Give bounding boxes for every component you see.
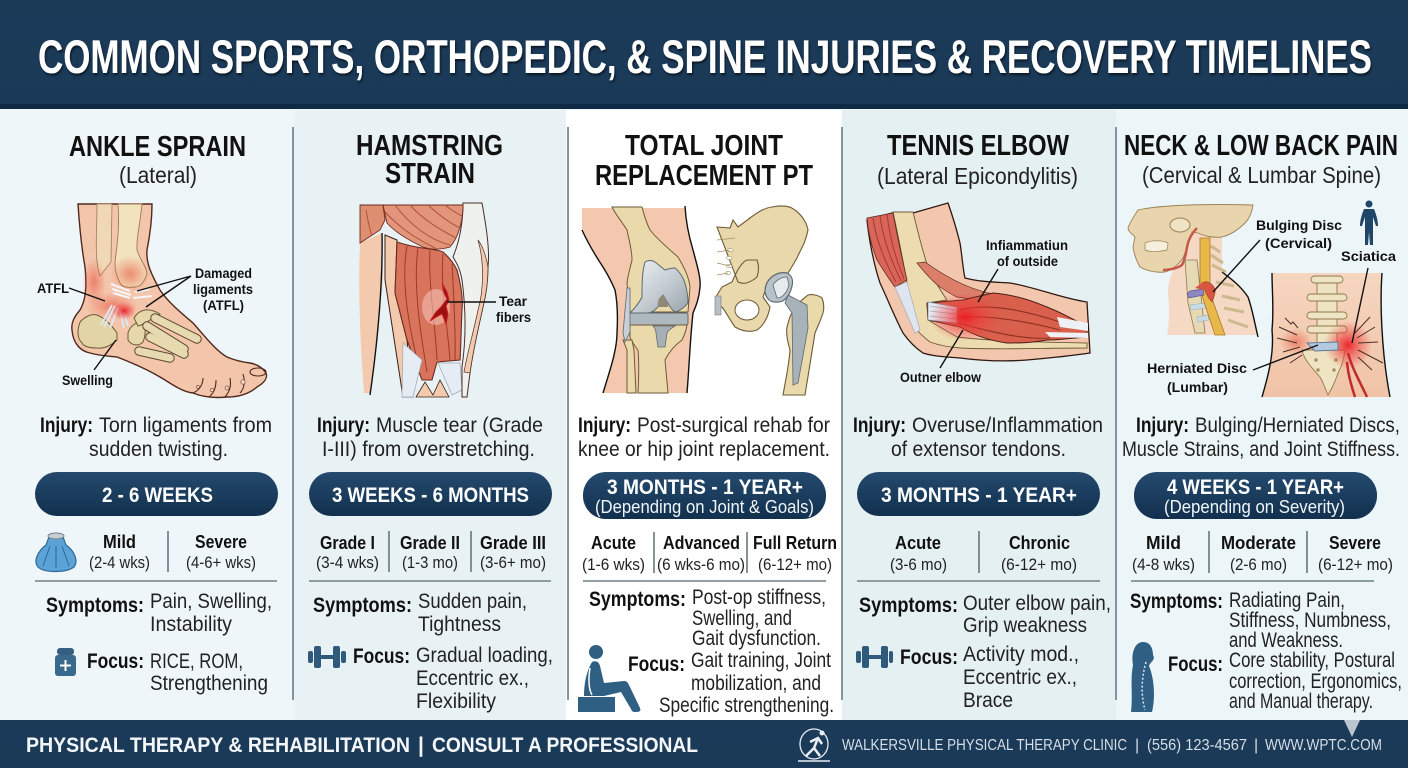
symptoms (1130, 589, 1391, 652)
illustration: knee replacement (582, 206, 700, 393)
injury text: Muscle tear (Grade (376, 414, 543, 437)
stage breakdown: Acute (895, 533, 941, 553)
icon: dumbbell (308, 646, 346, 668)
label: tear fibers: Tear (499, 293, 528, 309)
label: outer elbow: Outner elbow (900, 369, 981, 385)
icon: ice bag (36, 533, 76, 572)
footer tagline: CONSULT A PROFESSIONAL (432, 734, 698, 757)
label: herniated disc (1147, 345, 1318, 395)
label: inflammation of outside: of outside (997, 253, 1058, 269)
focus: Focus: (1168, 653, 1223, 676)
stage breakdown: Full Return (753, 533, 837, 553)
stage breakdown: Chronic (1009, 533, 1070, 553)
label: damaged ligaments: Damaged (195, 265, 252, 281)
label: ATFL: ATFL (37, 280, 69, 296)
footer bar (0, 720, 1408, 768)
focus (353, 644, 553, 713)
injury text (578, 414, 830, 461)
symptoms: Gait dysfunction. (692, 627, 821, 650)
focus: Focus: (353, 645, 410, 668)
injury text: sudden twisting. (89, 438, 228, 461)
focus: Focus: (628, 653, 685, 676)
footer tagline (26, 734, 698, 757)
stage breakdown: Severe (1329, 533, 1381, 553)
heading: tennis elbow: (Lateral Epicondylitis) (877, 163, 1078, 189)
injury text (1122, 414, 1400, 461)
panel: tennis elbow (842, 110, 1116, 720)
clinic contact: (556) 123-4567 (1147, 737, 1247, 754)
focus: RICE, ROM, (150, 650, 243, 673)
injury text: Injury: (578, 414, 631, 437)
symptoms: Symptoms: (589, 588, 686, 611)
injury text: knee or hip joint replacement. (578, 438, 830, 461)
icon: seated person (578, 645, 640, 712)
focus: Activity mod., (963, 643, 1079, 666)
symptoms: Tightness (418, 613, 501, 636)
stage breakdown (857, 531, 1100, 581)
stage breakdown: Grade I (320, 533, 375, 553)
timeline pill (309, 472, 552, 516)
injury text: Injury: (40, 414, 93, 437)
injury text (317, 414, 543, 461)
stage breakdown: Acute (591, 533, 636, 553)
stage breakdown: Mild (103, 532, 136, 552)
footer tagline: | (418, 734, 424, 757)
timeline pill (583, 472, 826, 519)
stage breakdown: (3-6 mo) (890, 555, 947, 574)
stage breakdown: (6 wks-6 mo) (657, 555, 745, 574)
timeline pill: 3 WEEKS - 6 MONTHS (332, 484, 529, 507)
stage breakdown: (4-6+ wks) (186, 553, 256, 572)
clinic contact: WALKERSVILLE PHYSICAL THERAPY CLINIC (842, 737, 1127, 754)
label: bulging disc: (Cervical) (1265, 235, 1332, 251)
stage breakdown: Mild (1146, 533, 1181, 553)
focus: Gradual loading, (416, 644, 553, 667)
heading: neck and low back pain: (Cervical & Lumbar Spine) (1142, 162, 1381, 188)
focus: Specific strengthening. (659, 694, 834, 717)
stage breakdown: (2-4 wks) (89, 553, 150, 572)
focus: mobilization, and (691, 672, 821, 695)
stage breakdown: (6-12+ mo) (1318, 555, 1393, 574)
symptoms (46, 590, 272, 636)
icon: dumbbell (856, 646, 893, 668)
label: sciatica (1341, 248, 1396, 343)
injury text: Injury: (317, 414, 370, 437)
stage breakdown (309, 531, 551, 581)
focus: Eccentric ex., (963, 666, 1077, 689)
panel: hamstring strain (294, 110, 566, 720)
label: sciatica: Sciatica (1341, 248, 1396, 264)
timeline pill (35, 472, 278, 516)
label: inflammation of outside: Infiammatiun (986, 237, 1068, 253)
injury text: Torn ligaments from (99, 414, 272, 437)
heading: ankle sprain: ANKLE SPRAIN (69, 131, 246, 163)
stage breakdown: (3-4 wks) (316, 553, 379, 572)
panel: neck and low back pain (1116, 110, 1408, 720)
symptoms: Symptoms: (859, 594, 958, 617)
timeline pill: 2 - 6 WEEKS (102, 484, 213, 507)
label: swelling: Swelling (62, 372, 113, 388)
focus: Strengthening (150, 672, 268, 695)
timeline pill (1134, 472, 1377, 519)
label: inflammation of outside (978, 237, 1068, 302)
stage breakdown: (6-12+ mo) (1001, 555, 1077, 574)
label: damaged ligaments: ligaments (193, 281, 253, 297)
injury text: Injury: (853, 414, 906, 437)
injury text: Overuse/Inflammation (912, 414, 1103, 437)
stage breakdown: Advanced (663, 533, 740, 553)
focus: Focus: (87, 650, 144, 673)
symptoms: Symptoms: (313, 594, 412, 617)
label: bulging disc: Bulging Disc (1256, 217, 1342, 233)
clinic contact (842, 737, 1382, 754)
focus (1168, 649, 1402, 713)
icon: runner logo (798, 729, 830, 761)
label: herniated disc: Herniated Disc (1147, 360, 1247, 376)
stage breakdown: (1-3 mo) (402, 553, 458, 572)
clinic contact: | (1135, 737, 1139, 754)
stage breakdown: (2-6 mo) (1230, 555, 1287, 574)
label: tear fibers (447, 293, 531, 325)
heading: tennis elbow (877, 130, 1078, 189)
injury text: I-III) from overstretching. (322, 438, 535, 461)
heading: neck and low back pain (1124, 130, 1398, 188)
timeline pill: 4 WEEKS - 1 YEAR+ (1167, 476, 1344, 499)
heading: tennis elbow: TENNIS ELBOW (887, 130, 1070, 162)
panel: total joint replacement (566, 110, 842, 720)
icon: spine figure (1131, 642, 1154, 712)
focus (900, 643, 1079, 712)
heading: hamstring strain (356, 130, 503, 190)
label: ATFL (37, 280, 105, 301)
focus: Focus: (900, 646, 958, 669)
heading: hamstring strain: STRAIN (385, 158, 475, 190)
symptoms (859, 592, 1111, 637)
stage breakdown: (1-6 wks) (582, 555, 645, 574)
symptoms: Grip weakness (963, 614, 1087, 637)
symptoms (313, 590, 527, 636)
symptoms: Instability (150, 613, 232, 636)
illustration: ankle anatomy (72, 204, 267, 398)
injury text (853, 414, 1103, 461)
footer tagline: PHYSICAL THERAPY & REHABILITATION (26, 734, 410, 757)
timeline pill: 3 MONTHS - 1 YEAR+ (881, 484, 1077, 507)
illustration: cervical spine (1128, 205, 1258, 337)
label: damaged ligaments: (ATFL) (203, 297, 244, 313)
timeline pill: (Depending on Severity) (1164, 497, 1345, 517)
symptoms (589, 586, 826, 650)
focus (628, 649, 834, 717)
icon: body silhouette (1360, 200, 1378, 245)
clinic contact: | (1254, 737, 1258, 754)
symptoms: Sudden pain, (418, 590, 527, 613)
label: herniated disc: (Lumbar) (1167, 379, 1228, 395)
heading: total joint replacement: REPLACEMENT PT (595, 160, 813, 192)
stage breakdown (1131, 531, 1393, 581)
focus: Flexibility (416, 690, 496, 713)
heading: total joint replacement: TOTAL JOINT (625, 130, 783, 162)
panel: ankle sprain (0, 110, 294, 720)
heading: ankle sprain (69, 131, 246, 188)
stage breakdown (582, 532, 837, 581)
injury text: of extensor tendons. (891, 438, 1066, 461)
symptoms: Swelling, and (692, 607, 792, 630)
illustration: hip replacement (715, 206, 824, 395)
symptoms: Symptoms: (46, 594, 144, 617)
stage breakdown: (4-8 wks) (1132, 555, 1195, 574)
label: swelling (62, 340, 116, 388)
icon: medicine bottle (55, 648, 76, 676)
injury text: Injury: (1136, 414, 1189, 437)
illustration: lumbar spine (1262, 273, 1390, 397)
stage breakdown: Grade III (480, 533, 546, 553)
stage breakdown: Severe (195, 532, 247, 552)
symptoms: Radiating Pain, (1229, 589, 1345, 612)
stage breakdown: Grade II (400, 533, 460, 553)
injury text (40, 414, 272, 461)
focus: Gait training, Joint (691, 649, 831, 672)
label: bulging disc (1213, 217, 1342, 292)
header banner (0, 0, 1408, 109)
focus (87, 650, 268, 695)
illustration: hamstring muscles (359, 203, 489, 397)
symptoms: Outer elbow pain, (963, 592, 1111, 615)
stage breakdown: (6-12+ mo) (758, 555, 832, 574)
label: damaged ligaments (137, 265, 253, 313)
heading: hamstring strain: HAMSTRING (356, 130, 503, 162)
label: outer elbow (900, 330, 981, 385)
illustration: elbow anatomy (867, 203, 1090, 361)
label: tear fibers: fibers (496, 309, 531, 325)
timeline pill (857, 472, 1100, 516)
timeline pill: 3 MONTHS - 1 YEAR+ (607, 476, 803, 499)
injury text: Post-surgical rehab for (637, 414, 830, 437)
clinic contact: WWW.WPTC.COM (1265, 737, 1382, 754)
symptoms: Post-op stiffness, (692, 586, 826, 609)
symptoms: Symptoms: (1130, 590, 1223, 613)
heading: ankle sprain: (Lateral) (119, 162, 197, 188)
stage breakdown (35, 531, 277, 581)
focus: Brace (963, 689, 1013, 712)
symptoms: Pain, Swelling, (150, 590, 272, 613)
stage breakdown: Moderate (1221, 533, 1296, 553)
stage breakdown: (3-6+ mo) (480, 553, 546, 572)
focus: Eccentric ex., (416, 667, 529, 690)
timeline pill: (Depending on Joint & Goals) (595, 497, 814, 517)
heading: total joint replacement (595, 130, 813, 192)
symptoms: and Weakness. (1229, 629, 1343, 652)
